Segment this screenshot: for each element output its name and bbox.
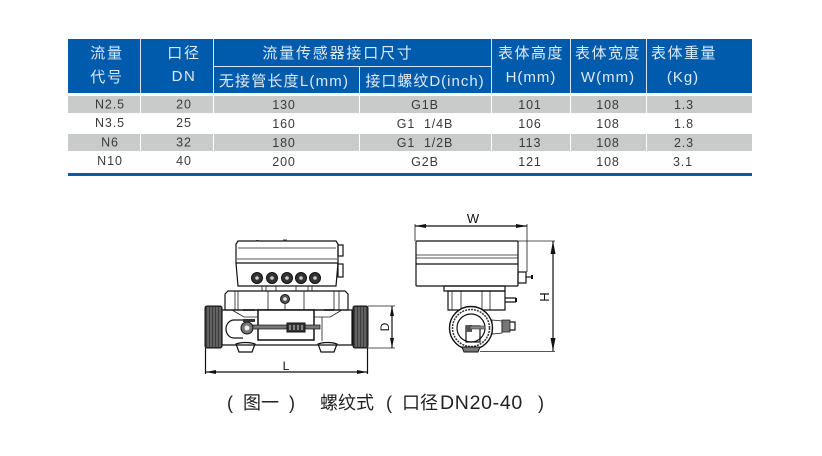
row: N2.5: N2.5: [95, 98, 125, 112]
table header: H(mm): [506, 69, 556, 86]
row: N2.5: 108: [596, 98, 620, 112]
row: N2.5: 130: [272, 98, 296, 112]
figure caption: 螺纹式: [320, 393, 374, 413]
table header: (Kg): [667, 69, 699, 86]
row: N10: 121: [518, 155, 542, 169]
row: N6: [68, 134, 752, 151]
meter body: [222, 286, 352, 345]
row: N3.5: 25: [176, 116, 192, 130]
dimension H: [480, 241, 556, 352]
front view drawing: [205, 240, 395, 374]
row: N6: 2.3: [674, 136, 694, 150]
dimension D: D: [378, 322, 392, 331]
row: N10: N10: [97, 154, 123, 168]
row: N10: 40: [176, 154, 192, 168]
row: N10: [97, 154, 693, 169]
dimension H: H: [537, 292, 552, 302]
row: N2.5: 101: [518, 98, 542, 112]
figure caption: DN20-40: [440, 392, 523, 414]
table header: [68, 39, 752, 93]
row: N2.5: 20: [176, 98, 192, 112]
row: N2.5: [68, 96, 752, 113]
cable glands: [252, 272, 320, 284]
sensor assembly: [226, 319, 320, 338]
row: N3.5: 1.8: [674, 117, 694, 131]
mounting feet: [236, 342, 337, 352]
row: N10: 3.1: [673, 155, 693, 169]
row: N3.5: G1 1/4B: [397, 117, 453, 131]
row: N3.5: N3.5: [95, 116, 125, 130]
row: N2.5: 1.3: [674, 98, 694, 112]
sensor head: [450, 306, 515, 352]
table header: 口径: [167, 45, 201, 62]
dimension L: [206, 348, 368, 374]
row: N10: 200: [272, 155, 296, 169]
row: N6: 32: [176, 136, 192, 150]
display housing: [236, 240, 343, 286]
row: N3.5: [95, 116, 694, 131]
mounting block: [444, 286, 517, 310]
table header: 接口螺纹D(inch): [365, 73, 485, 90]
figure caption: ): [289, 393, 295, 413]
row: N10: G2B: [411, 155, 439, 169]
table header: 表体重量: [651, 45, 717, 62]
table header: 无接管长度L(mm): [219, 73, 349, 90]
row: N2.5: G1B: [411, 98, 439, 112]
side view drawing: [415, 211, 556, 352]
row: N3.5: 160: [272, 117, 296, 131]
row: N6: 180: [272, 136, 296, 150]
row: N6: 108: [596, 136, 620, 150]
row: N3.5: 106: [518, 117, 542, 131]
dimension D: [368, 306, 395, 348]
table header: DN: [172, 68, 196, 85]
dimension L: L: [283, 359, 290, 373]
row: N10: 108: [596, 155, 620, 169]
row: N6: 113: [519, 136, 541, 150]
dimension W: W: [467, 211, 480, 226]
housing side: [416, 241, 533, 286]
row: N6: N6: [101, 136, 119, 150]
figure caption: 图一: [243, 393, 279, 413]
table header: 代号: [90, 69, 124, 86]
dimension W: [415, 211, 527, 272]
figure caption: (: [386, 393, 392, 413]
row: N6: G1 1/2B: [397, 136, 453, 150]
specification table: [68, 39, 752, 176]
threaded ends: [205, 306, 368, 348]
figure caption: ): [538, 393, 544, 413]
table header: 流量: [90, 45, 124, 62]
table header: 表体宽度: [575, 45, 641, 62]
table header: 流量传感器接口尺寸: [262, 45, 414, 62]
table bottom rule: [68, 173, 752, 176]
row: N3.5: 108: [596, 117, 620, 131]
table header: 表体高度: [498, 45, 564, 62]
figure caption: (: [227, 393, 233, 413]
figure caption: 口径: [402, 393, 438, 413]
figure caption: [227, 392, 544, 414]
table header: W(mm): [581, 69, 635, 86]
